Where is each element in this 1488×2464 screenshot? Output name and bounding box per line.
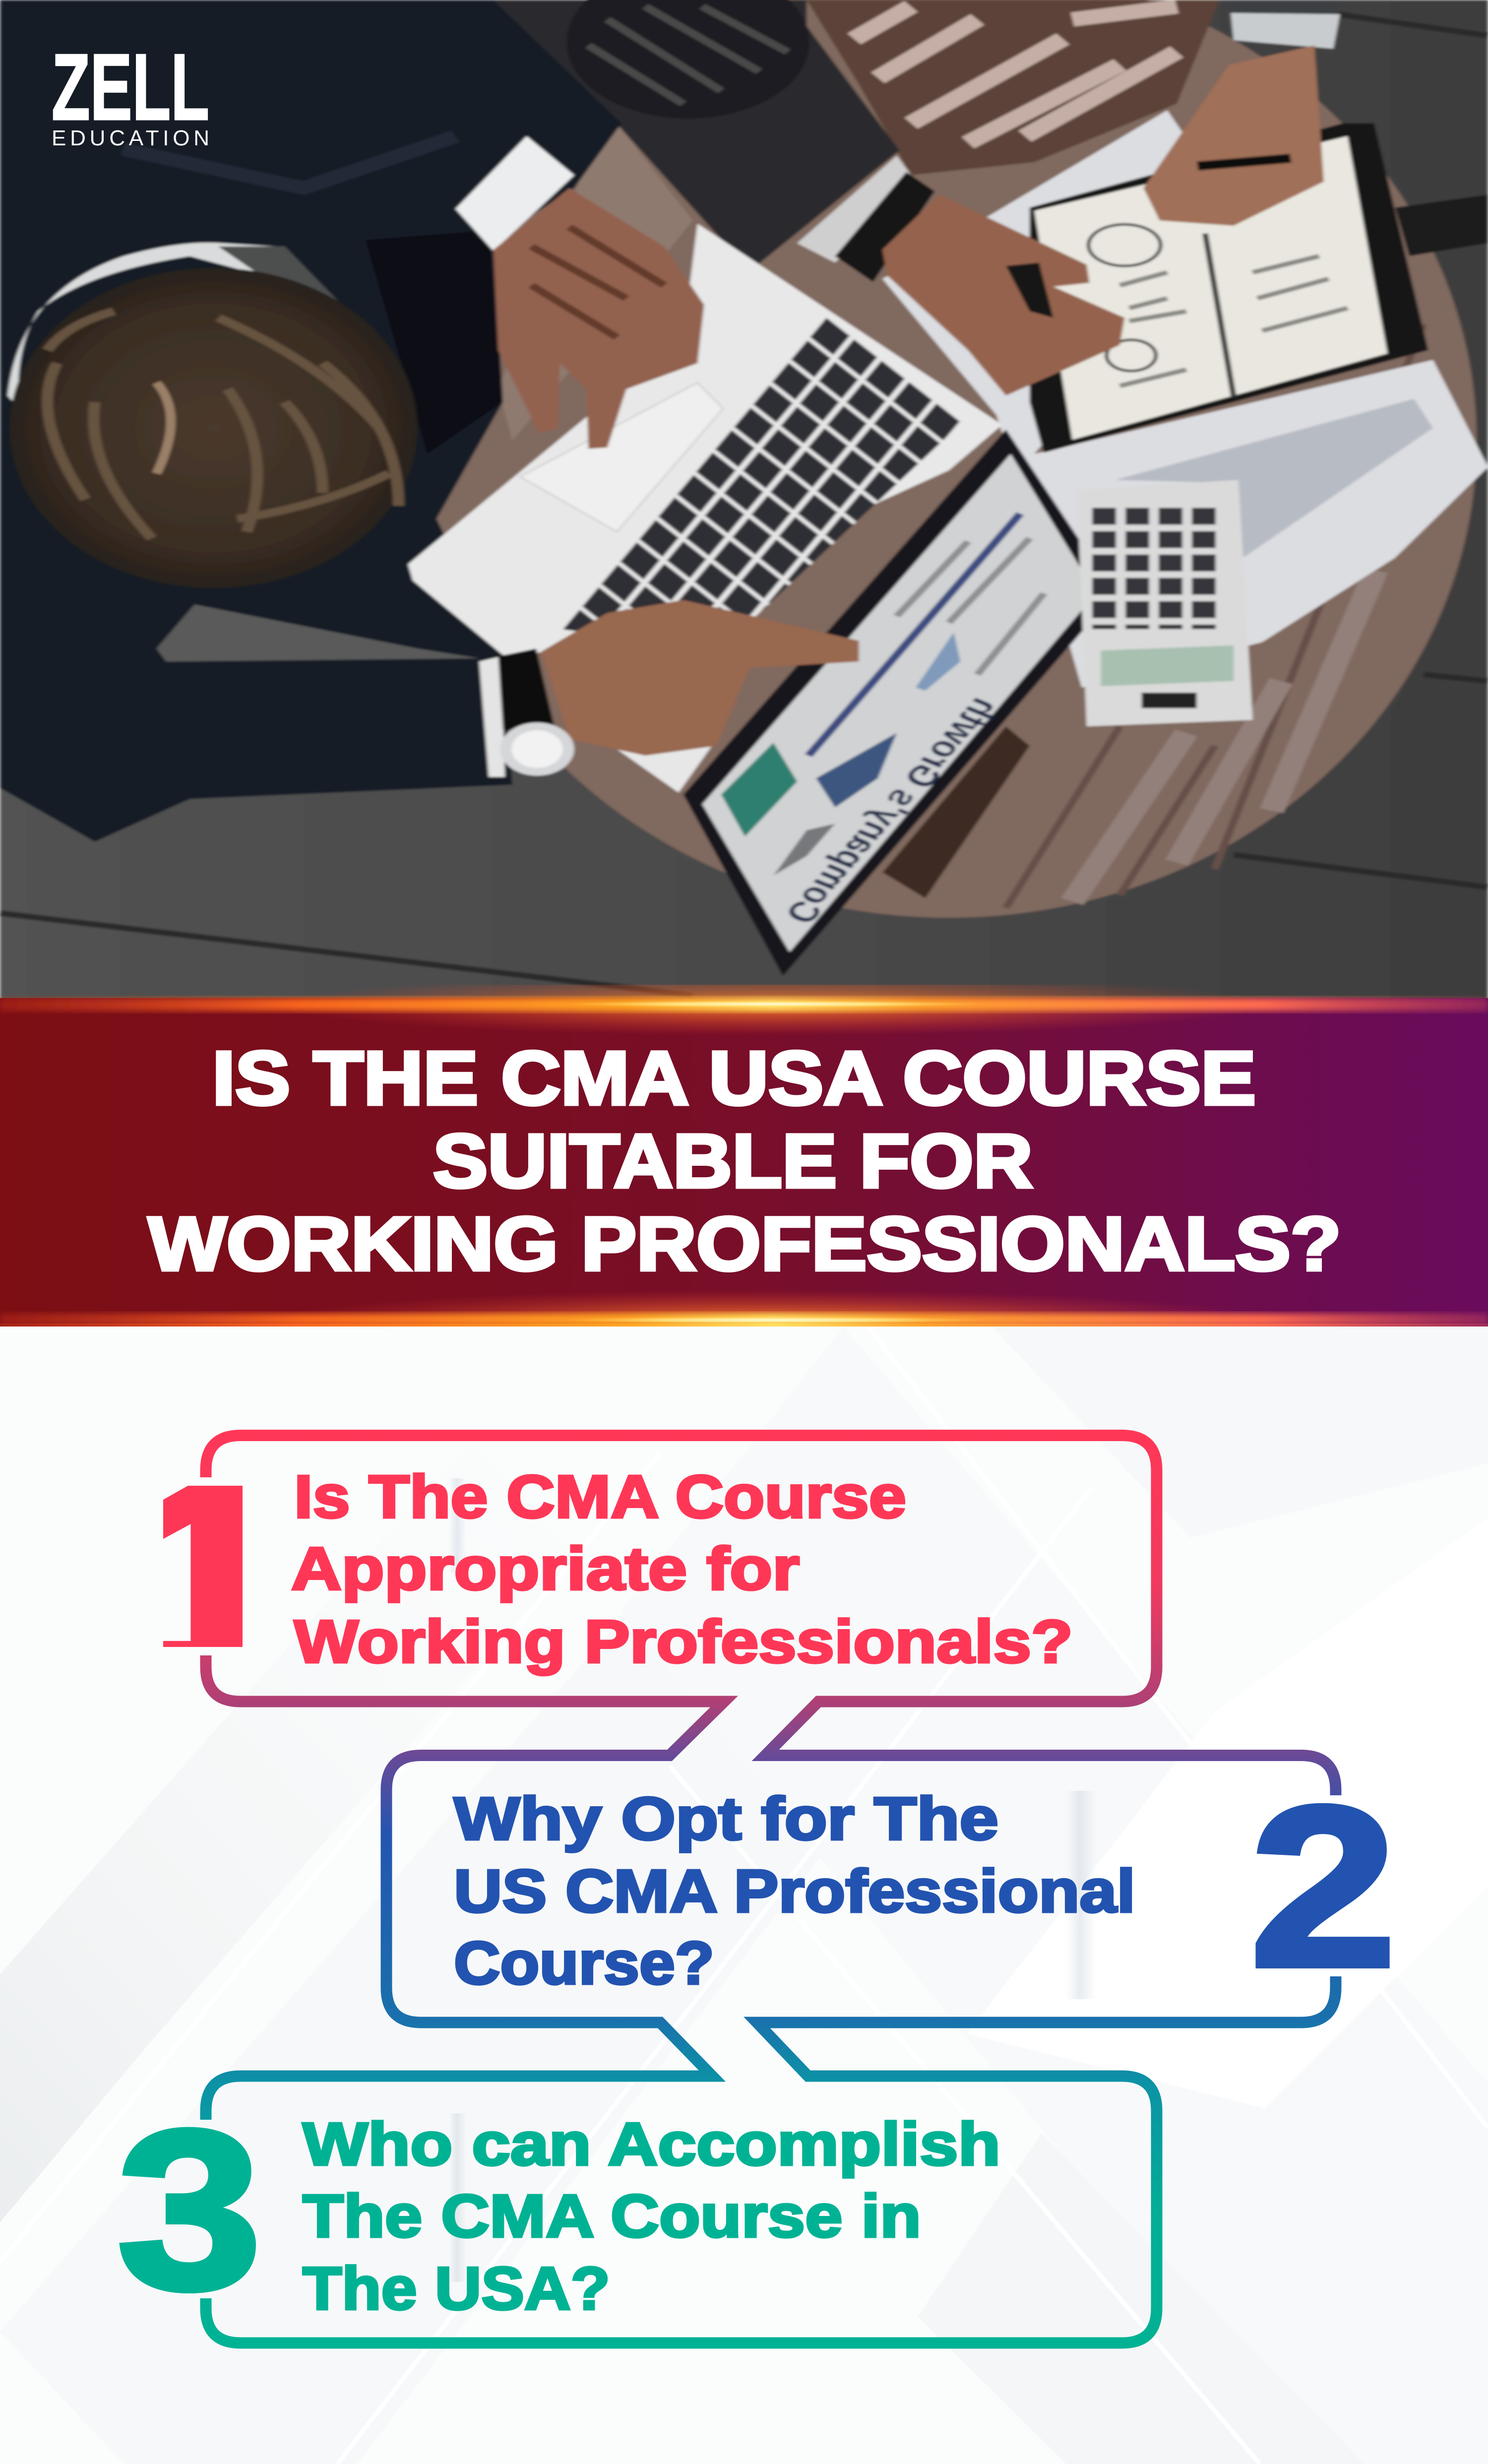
laptop — [408, 224, 1002, 793]
notebook — [1030, 123, 1488, 453]
question 1 text — [291, 1463, 1073, 1675]
title text: IS THE CMA USA COURSE — [212, 1036, 1256, 1121]
hand writing in the notebook — [835, 172, 1124, 396]
panel 2: question two — [386, 1728, 1397, 2049]
speech bubble outline 3 — [206, 2049, 1157, 2343]
number 3: 3 — [117, 2083, 262, 2336]
tablet with company growth report — [683, 429, 1115, 976]
number 2: 2 — [1250, 1760, 1397, 2014]
number 1: 1 — [122, 1426, 297, 1731]
question 2 text: Why Opt for The — [454, 1785, 998, 1852]
title text: SUITABLE FOR — [433, 1119, 1033, 1203]
man at top: shirt cuff, suit and hair — [484, 0, 1343, 271]
question 1 text: Is The CMA Course — [294, 1463, 906, 1530]
speech bubble outline 1 — [206, 1436, 1157, 1728]
question 3 text: Who can Accomplish — [303, 2110, 1000, 2178]
question 2 text: US CMA Professional — [454, 1857, 1135, 1925]
panel 3: question three — [117, 2049, 1157, 2343]
question 2 text: Course? — [454, 1929, 714, 1997]
top light streak — [0, 985, 1488, 1033]
question 1 text: Working Professionals? — [294, 1608, 1073, 1675]
head with brown hair — [9, 268, 418, 588]
bottom light streak — [0, 1293, 1488, 1327]
pointing hand with wristwatch — [479, 600, 859, 777]
title text: WORKING PROFESSIONALS? — [148, 1201, 1341, 1286]
logo: Zell Education: ZELL — [52, 35, 209, 140]
wooden table — [421, 0, 1477, 918]
question 1 text: Appropriate for — [291, 1535, 800, 1602]
hand holding the pen — [1143, 46, 1324, 226]
background: pale geometric panel — [0, 1327, 1488, 2464]
question 3 text: The CMA Course in — [303, 2182, 921, 2250]
question 3 text — [303, 2110, 1000, 2322]
calculator — [1077, 480, 1253, 726]
hand on the laptop — [455, 136, 704, 449]
question 2 text — [454, 1785, 1135, 1997]
man at left: suit body and arm — [0, 0, 621, 842]
logo: Zell Education: EDUCATION — [52, 126, 209, 150]
screen heading: Company's Growth — [776, 693, 1009, 929]
wallet — [882, 726, 1030, 898]
question 3 text: The USA? — [303, 2255, 610, 2322]
shirt collar — [7, 243, 379, 409]
photo: business team working at a table — [0, 0, 1488, 998]
panel 1: question one — [122, 1426, 1157, 1731]
logo: Zell Education — [52, 35, 209, 150]
documents under the laptop — [882, 110, 1488, 688]
title text — [146, 1050, 1338, 1272]
speech bubble outline 2 — [386, 1728, 1336, 2049]
title banner — [0, 974, 1488, 1351]
